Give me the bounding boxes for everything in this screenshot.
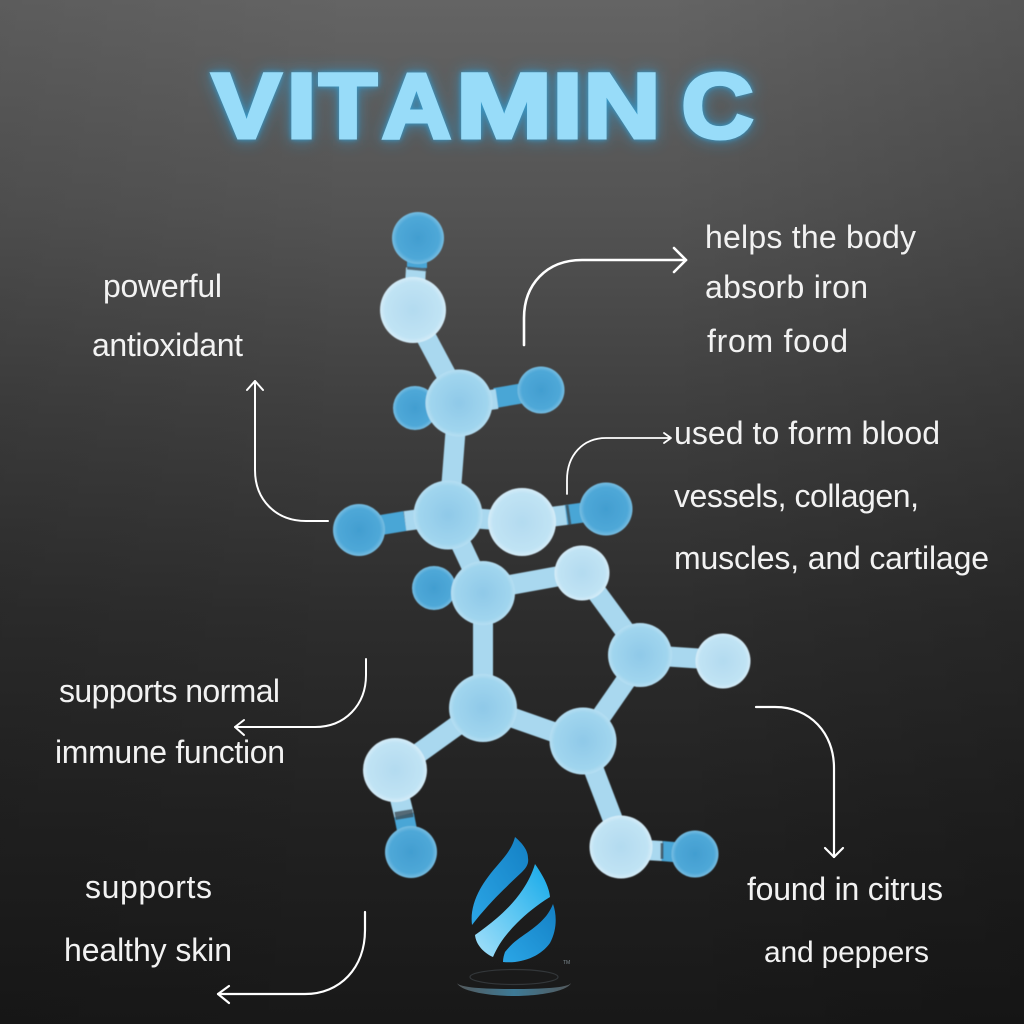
- logo ring top arc: [470, 970, 558, 984]
- text: supports healthy skin: supports: [85, 869, 212, 905]
- text: powerful antioxidant: powerful: [103, 268, 222, 304]
- arrow: to used to form blood: [567, 433, 671, 494]
- title: A: [382, 56, 451, 158]
- drop middle segment: [475, 864, 550, 957]
- title: M: [456, 56, 552, 158]
- trademark: TM: [563, 960, 570, 966]
- title: I: [286, 56, 316, 158]
- icon: water drop logo: [457, 837, 571, 996]
- text: supports normal immune function: [55, 673, 285, 770]
- arrow: to helps the body: [524, 248, 686, 345]
- title: I: [552, 56, 582, 158]
- title: V: [212, 56, 281, 158]
- text: helps the body absorb iron from food: [705, 219, 916, 359]
- text: supports normal immune function: immune function: [55, 734, 285, 770]
- text: helps the body absorb iron from food: absorb iron: [705, 269, 868, 305]
- arrow: to powerful antioxidant: [247, 381, 328, 521]
- title: T: [319, 56, 377, 158]
- title: I: [552, 56, 582, 158]
- text: supports healthy skin: [64, 869, 232, 968]
- text: used to form blood vessels, collagen, muscles, and cartilage: vessels, collagen,: [674, 478, 919, 514]
- text: supports healthy skin: healthy skin: [64, 932, 232, 968]
- atoms behind: [393, 386, 437, 430]
- title: C: [682, 56, 754, 158]
- title: C: [682, 56, 754, 158]
- title: M: [456, 56, 552, 158]
- text: helps the body absorb iron from food: from food: [707, 323, 848, 359]
- text: used to form blood vessels, collagen, muscles, and cartilage: muscles, and cartilage: [674, 540, 989, 576]
- arrow: to found in citrus: [756, 707, 843, 857]
- bonds: [375, 250, 706, 859]
- title: A: [382, 56, 451, 158]
- title: N: [584, 56, 660, 158]
- text: powerful antioxidant: antioxidant: [92, 327, 243, 363]
- atoms: carbon: [414, 370, 672, 774]
- title: I: [286, 56, 316, 158]
- arrow: to healthy skin: [218, 912, 365, 1003]
- logo ring crescent: [457, 983, 571, 996]
- title: I: [286, 56, 316, 158]
- text: found in citrus and peppers: and peppers: [764, 936, 929, 969]
- title: T: [319, 56, 377, 158]
- text: found in citrus and peppers: [747, 871, 943, 969]
- title: I: [552, 56, 582, 158]
- text: supports normal immune function: supports normal: [59, 673, 280, 709]
- text: found in citrus and peppers: found in citrus: [747, 871, 943, 907]
- arrow: to supports normal immune function: [235, 659, 366, 735]
- title: N: [584, 56, 660, 158]
- title: V: [212, 56, 281, 158]
- text: helps the body absorb iron from food: helps the body: [705, 219, 916, 255]
- text: used to form blood vessels, collagen, muscles, and cartilage: [674, 415, 989, 576]
- title: A: [382, 56, 451, 158]
- title: N: [584, 56, 660, 158]
- molecule diagram: [333, 212, 750, 878]
- title: V: [212, 56, 281, 158]
- drop bottom segment: [503, 904, 556, 962]
- title: M: [456, 56, 552, 158]
- atoms: oxygen and hydrogen: [333, 212, 750, 878]
- title: [212, 56, 754, 158]
- drop top segment: [472, 837, 528, 925]
- title: T: [319, 56, 377, 158]
- text: powerful antioxidant: [92, 268, 243, 363]
- text: used to form blood vessels, collagen, muscles, and cartilage: used to form blood: [674, 415, 940, 451]
- title: C: [682, 56, 754, 158]
